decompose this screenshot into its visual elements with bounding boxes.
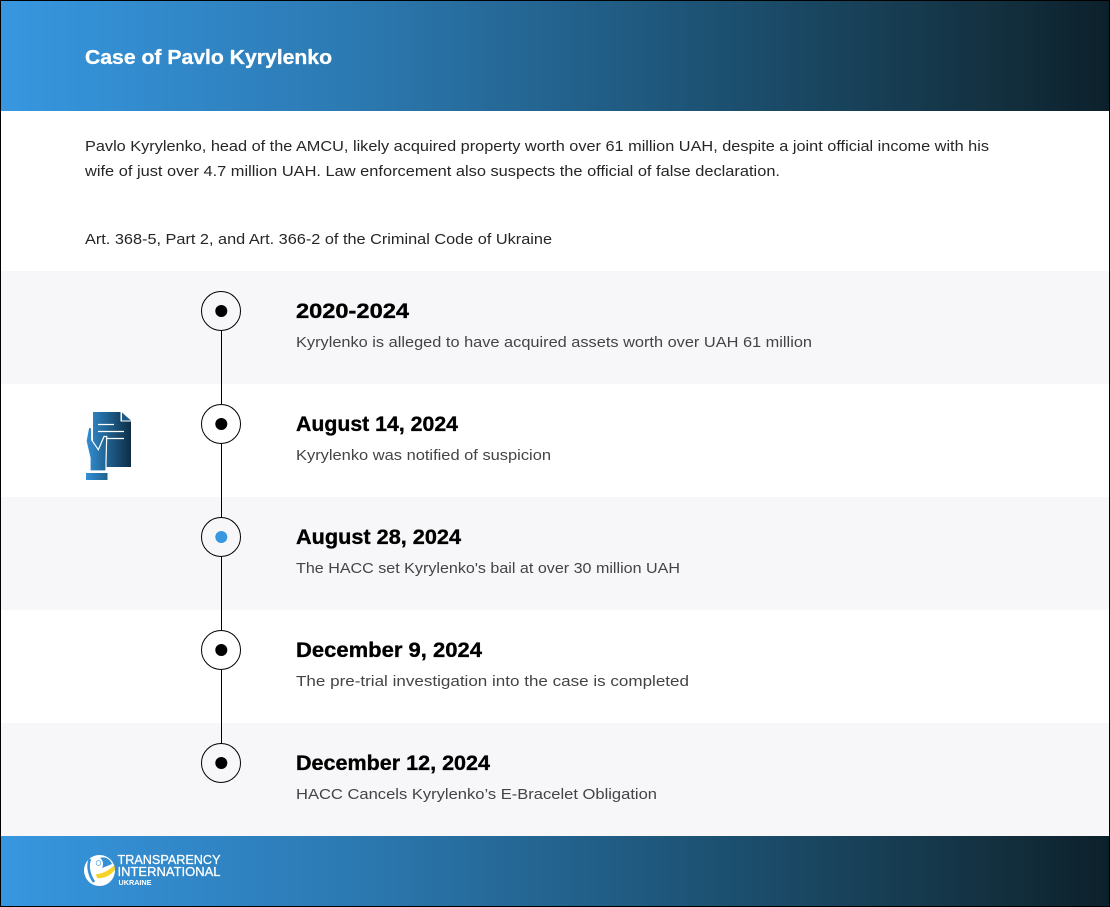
intro text: [84, 138, 989, 180]
footer banner: [0, 836, 1110, 907]
milestone December 9, 2024: The pre-trial investigation into the case is completed: [296, 673, 689, 690]
icon: hand holding document: [86, 412, 131, 480]
timeline line: [220, 311, 222, 763]
milestone August 28, 2024: August 28, 2024: [296, 526, 461, 549]
milestone 2020-2024: [202, 292, 812, 351]
milestone August 14, 2024: [202, 404, 551, 464]
logo: Transparency International Ukraine: UKRAINE: [118, 880, 152, 887]
milestone December 12, 2024: [202, 744, 657, 803]
intro text: Pavlo Kyrylenko, head of the AMCU, likely acquired property worth over 61 million UAH, despite a joint official income with his: [85, 138, 989, 155]
timeline rows background: [0, 271, 1110, 836]
milestone December 9, 2024: [202, 630, 689, 690]
logo: Transparency International Ukraine: INTERNATIONAL: [118, 865, 221, 879]
milestone December 12, 2024: HACC Cancels Kyrylenko’s E-Bracelet Obligation: [296, 786, 657, 803]
milestone December 12, 2024: December 12, 2024: [296, 752, 490, 775]
milestone 2020-2024: Kyrylenko is alleged to have acquired assets worth over UAH 61 million: [296, 334, 812, 351]
milestone December 9, 2024: December 9, 2024: [296, 639, 482, 662]
intro text: wife of just over 4.7 million UAH. Law enforcement also suspects the official of false declaration.: [84, 163, 780, 180]
logo: Transparency International Ukraine: TRANSPARENCY: [118, 853, 221, 867]
header banner: [0, 0, 1110, 111]
legal articles: Art. 368-5, Part 2, and Art. 366-2 of the Criminal Code of Ukraine: [85, 231, 552, 248]
milestone August 28, 2024: [202, 518, 680, 577]
milestone August 28, 2024: The HACC set Kyrylenko's bail at over 30 million UAH: [296, 560, 680, 577]
logo: Transparency International Ukraine: [84, 853, 221, 887]
milestone August 14, 2024: Kyrylenko was notified of suspicion: [296, 447, 551, 464]
milestone 2020-2024: 2020-2024: [296, 300, 409, 323]
milestone August 14, 2024: August 14, 2024: [296, 413, 458, 436]
title: Case of Pavlo Kyrylenko: [85, 47, 332, 69]
